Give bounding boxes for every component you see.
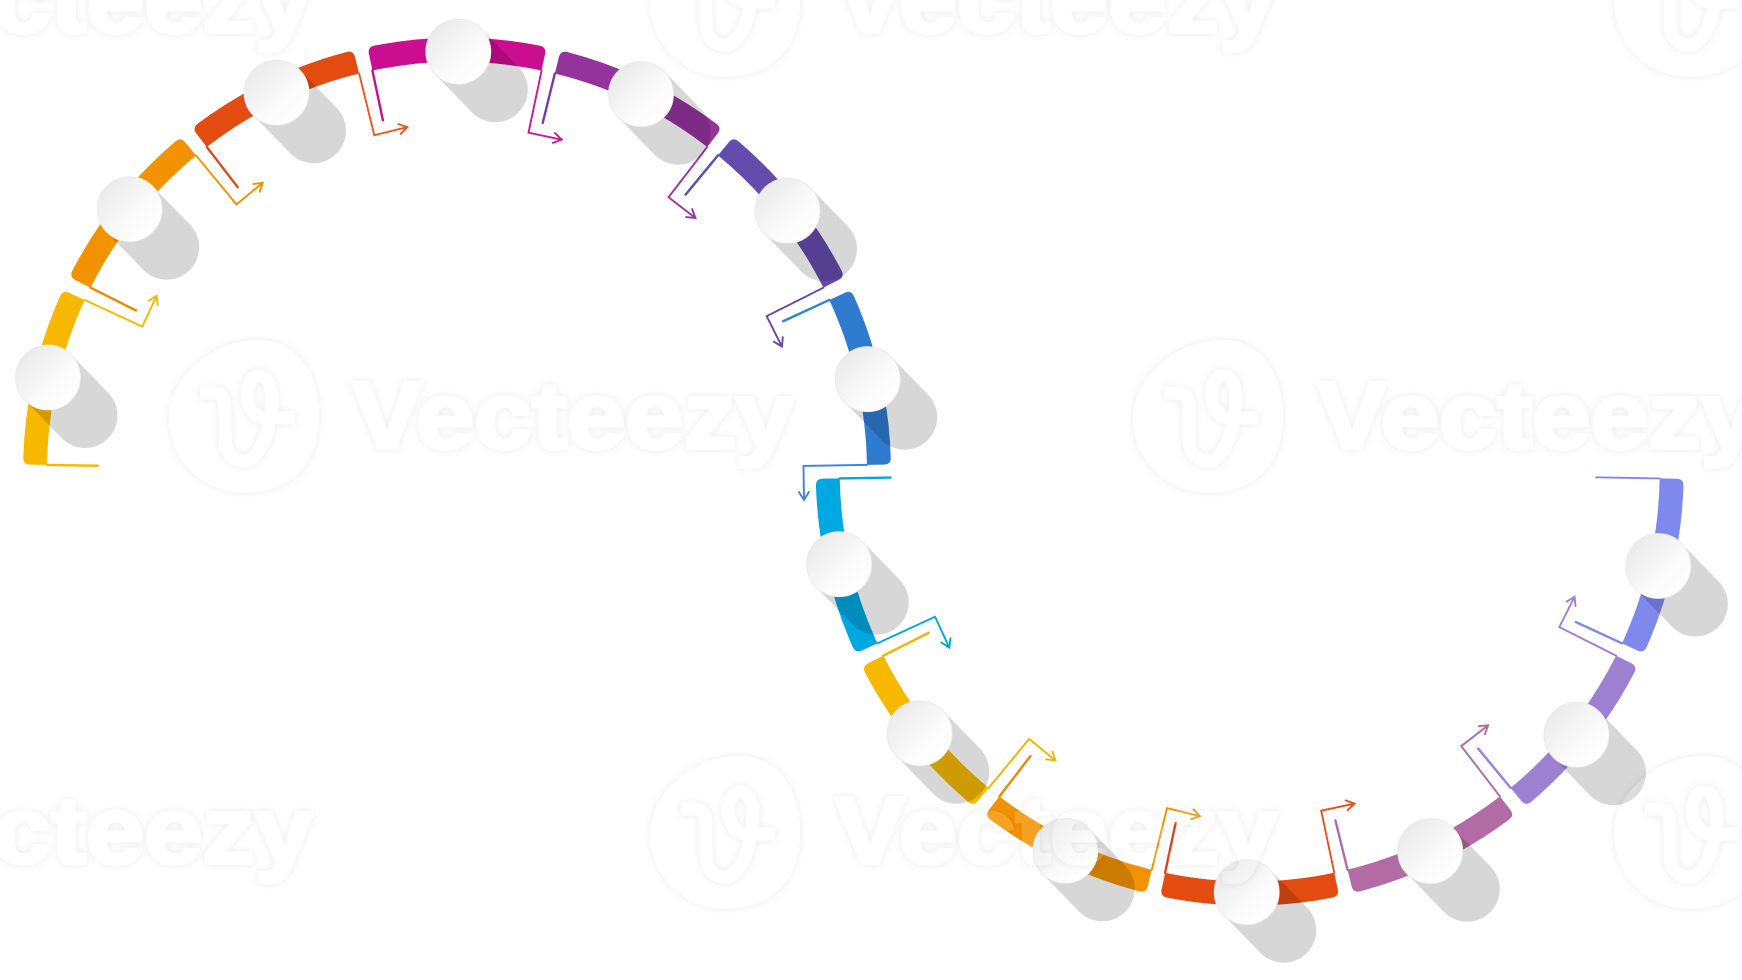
step 10 segment: orange xyxy=(984,709,1204,923)
disc 4 xyxy=(426,19,491,84)
step 13 segment: lavender xyxy=(1441,593,1661,807)
watermark: logo monograms and wordmarks: Vecteezy xyxy=(352,363,794,469)
step 1 segment: yellow xyxy=(23,292,158,466)
disc 13 xyxy=(1544,702,1609,767)
disc 12 xyxy=(1398,819,1463,884)
disc 10 xyxy=(1033,818,1098,883)
disc 11 xyxy=(1214,860,1279,925)
step 2 segment: orange xyxy=(69,122,265,337)
step 4 segment: magenta xyxy=(366,9,566,179)
watermark: logo monograms and wordmarks: Vecteezy xyxy=(1317,363,1742,469)
step 3 segment: red-orange xyxy=(191,20,411,234)
disc 3 xyxy=(244,60,309,125)
disc 6 xyxy=(755,178,820,243)
step 7 segment: blue xyxy=(729,289,926,504)
disc 8 xyxy=(807,532,872,597)
step 9 segment: yellow xyxy=(861,607,1058,822)
upper arc: steps 1 to 7 xyxy=(23,9,926,504)
step 12 segment: mauve xyxy=(1322,723,1521,893)
step 11 segment: red-orange xyxy=(1159,765,1358,935)
disc 5 xyxy=(608,62,674,127)
step 8 segment: cyan xyxy=(816,478,950,651)
disc 14 xyxy=(1626,534,1691,598)
disc 1 xyxy=(16,345,80,410)
disc 2 xyxy=(97,177,162,242)
step 6 segment: indigo xyxy=(648,136,868,350)
lower arc: steps 8 to 14 xyxy=(816,446,1719,935)
disc 9 xyxy=(887,701,952,766)
watermark: logo monograms and wordmarks: Vecteezy xyxy=(835,778,1277,884)
disc 7 xyxy=(835,347,900,412)
step 5 segment: purple xyxy=(529,50,729,220)
step 14 segment: periwinkle with closing line xyxy=(1536,446,1719,654)
